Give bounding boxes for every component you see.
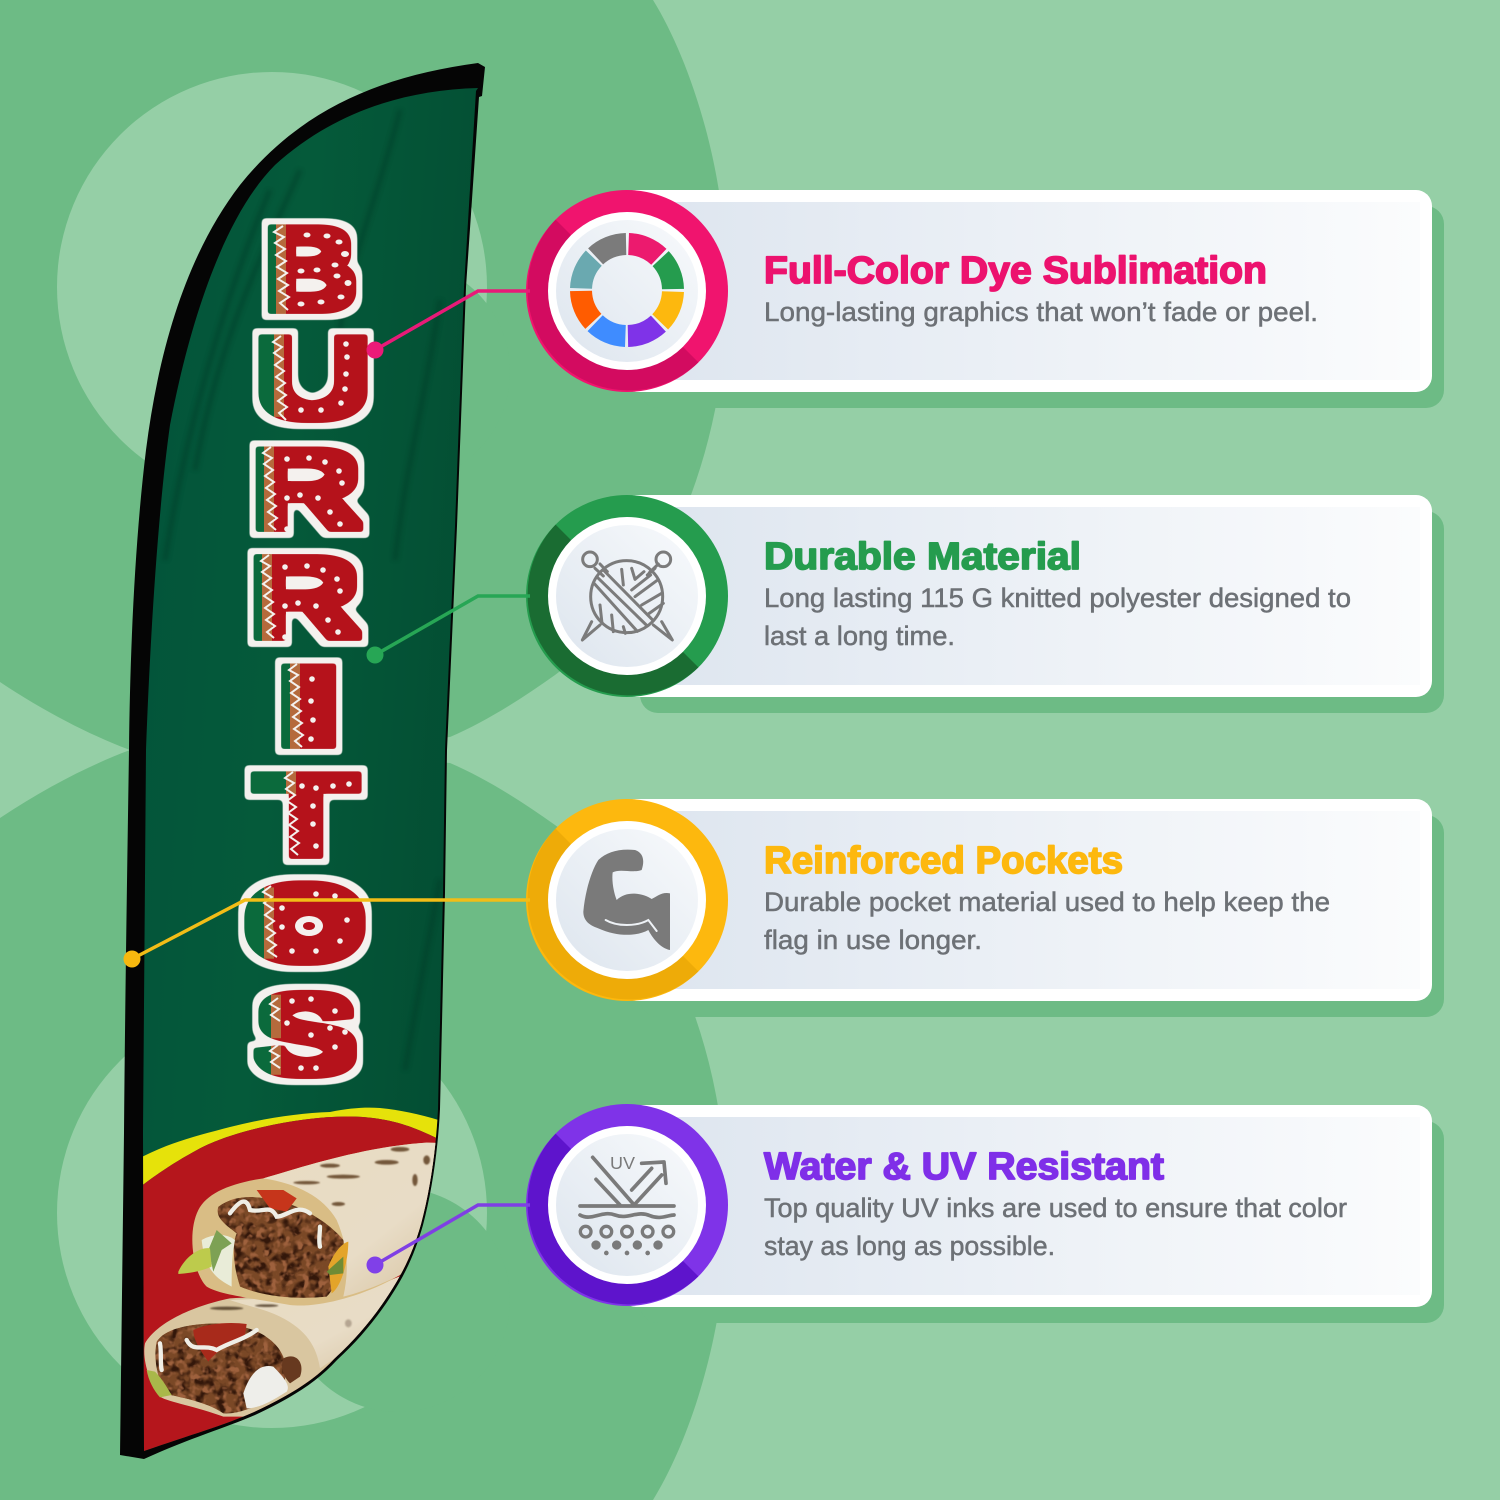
card 1: Full-Color Dye Sublimation xyxy=(526,190,1444,408)
icon: UV protection layers xyxy=(580,1153,674,1255)
card inner panel xyxy=(640,507,1420,685)
letter T xyxy=(254,752,359,878)
letter O xyxy=(243,863,368,983)
card 4: Water & UV Resistant xyxy=(526,1104,1444,1323)
card shadow xyxy=(640,206,1444,408)
large green scalloped shape xyxy=(0,0,727,1500)
icon badge ring xyxy=(526,495,728,697)
icon badge ring xyxy=(526,190,728,392)
icon badge ring xyxy=(526,799,728,1001)
icon: yarn ball and needles xyxy=(582,552,672,640)
card shadow xyxy=(640,1121,1444,1323)
letter O: O xyxy=(243,863,368,983)
card shadow xyxy=(640,511,1444,713)
inner light circle: lower xyxy=(57,998,487,1428)
letter I xyxy=(265,645,352,768)
card body xyxy=(620,1105,1432,1307)
flag lettering: BURRITOS xyxy=(243,204,373,1097)
flag fabric xyxy=(143,88,478,1451)
letter R: R xyxy=(250,428,362,551)
icon badge ring xyxy=(526,1104,728,1306)
description: Durable pocket material used to help keep the xyxy=(764,887,1330,917)
card inner panel xyxy=(640,202,1420,380)
letter U: U xyxy=(253,315,373,441)
lower burrito xyxy=(144,1276,400,1417)
description: Long-lasting graphics that won’t fade or peel. xyxy=(764,297,1318,327)
description xyxy=(764,1193,1347,1261)
card 2: Durable Material xyxy=(526,495,1444,713)
description xyxy=(764,583,1351,651)
description: last a long time. xyxy=(764,621,955,651)
description: Top quality UV inks are used to ensure that color xyxy=(764,1193,1347,1223)
heading: Full-Color Dye Sublimation xyxy=(764,250,1267,292)
connector: yellow xyxy=(124,900,530,968)
icon: color wheel xyxy=(562,225,692,355)
connector: green xyxy=(366,596,530,664)
letter S: S xyxy=(254,972,358,1097)
card body xyxy=(620,799,1432,1001)
upper burrito xyxy=(178,1143,457,1306)
icon: flexed arm xyxy=(583,850,670,950)
burrito photo xyxy=(144,1143,457,1420)
description: stay as long as possible. xyxy=(764,1231,1055,1261)
inner light circle: upper xyxy=(57,72,487,502)
crescent cut: lower xyxy=(286,1188,510,1412)
heading: Reinforced Pockets xyxy=(764,840,1123,882)
feather flag xyxy=(120,60,490,1460)
letter R: R xyxy=(248,535,361,660)
icon: UV protection layers: UV xyxy=(610,1153,635,1173)
card body xyxy=(620,190,1432,392)
description: flag in use longer. xyxy=(764,925,982,955)
yellow swoosh xyxy=(140,1108,445,1187)
flag pole sleeve and edge xyxy=(120,63,485,1459)
card body xyxy=(620,495,1432,697)
card inner panel xyxy=(640,811,1420,989)
description xyxy=(764,887,1330,955)
card inner panel xyxy=(640,1117,1420,1295)
heading: Durable Material xyxy=(764,536,1081,578)
red panel xyxy=(140,1117,445,1460)
description: Long lasting 115 G knitted polyester designed to xyxy=(764,583,1351,613)
card shadow xyxy=(640,815,1444,1017)
card 3: Reinforced Pockets xyxy=(526,799,1444,1017)
letter B: B xyxy=(264,204,357,334)
letter I: I xyxy=(265,645,352,768)
connector: purple xyxy=(366,1205,530,1274)
connector: pink xyxy=(366,291,530,358)
letter U xyxy=(253,315,373,441)
letter T: T xyxy=(254,752,359,878)
heading: Water & UV Resistant xyxy=(764,1146,1164,1188)
crescent cut: upper xyxy=(286,260,510,484)
